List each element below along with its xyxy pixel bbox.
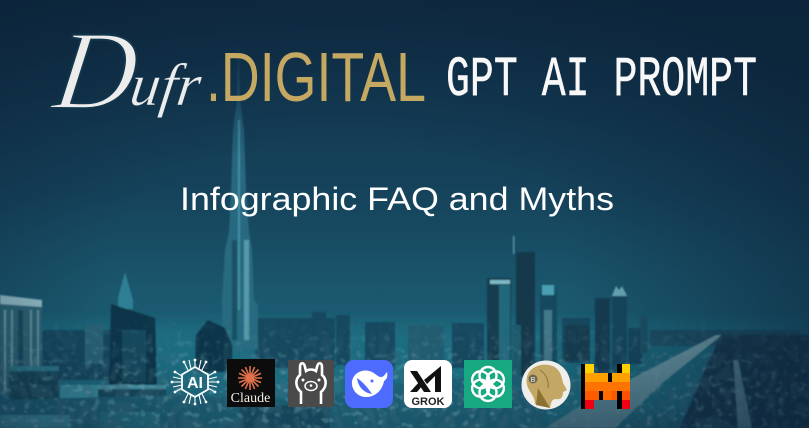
left towers — [0, 272, 232, 426]
icon: Grok — [404, 360, 452, 408]
icon: AI chip: AI — [187, 375, 203, 392]
city ground — [0, 335, 809, 428]
city texture — [4, 343, 797, 428]
logo script: Dufr: D — [45, 9, 146, 133]
heading: Infographic FAQ and Myths — [180, 181, 614, 217]
icon: AI chip — [171, 359, 219, 405]
icon: Ollama — [288, 360, 334, 407]
logo digital wordmark: .DIGITAL — [206, 38, 426, 116]
logo row — [171, 359, 630, 410]
icon: Mistral — [581, 364, 630, 409]
highway — [545, 335, 722, 428]
icon: DeepSeek — [345, 360, 393, 408]
icon: Claude: Claude — [231, 391, 270, 406]
city lights — [0, 331, 808, 428]
Burj Khalifa tower — [222, 45, 258, 350]
icon: Claude — [227, 359, 275, 407]
logo script: Dufr — [45, 9, 212, 133]
logo script: Dufr: ufr — [126, 52, 206, 119]
distant buildings — [42, 312, 800, 380]
icon: Grok: GROK — [412, 396, 445, 408]
icon: profile head: B — [531, 377, 536, 384]
second road — [733, 360, 752, 428]
icon: ChatGPT — [464, 360, 512, 408]
icon: profile head — [522, 360, 570, 410]
logo: Dufr.DIGITAL — [45, 9, 426, 133]
horizon glow — [0, 322, 809, 422]
right towers — [487, 236, 648, 395]
